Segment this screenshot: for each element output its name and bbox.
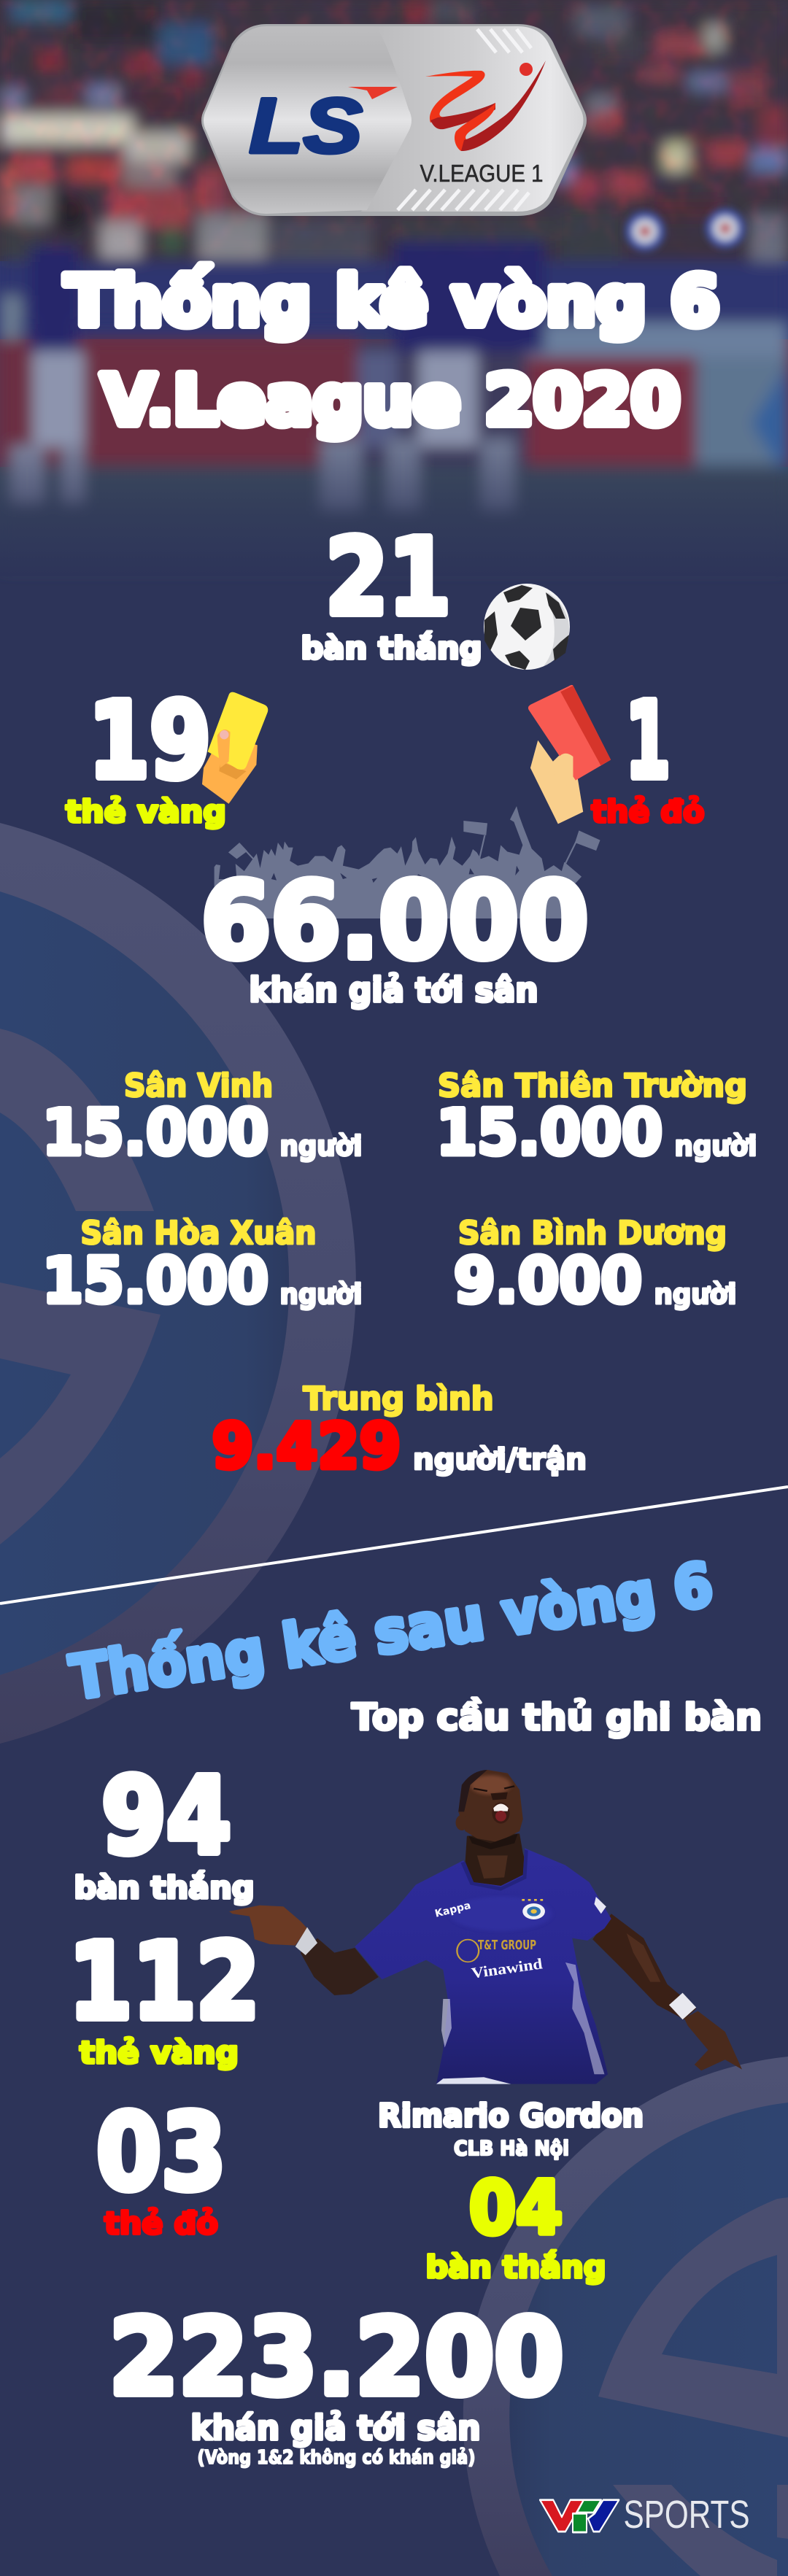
logo: VTV Sports — [540, 2493, 750, 2537]
title: V.League 2020 — [101, 361, 680, 441]
player goals: bàn thắng — [426, 2249, 606, 2285]
icon: crowd silhouette — [215, 806, 600, 918]
season stat: total attendance — [109, 2296, 563, 2469]
stat: average attendance: Trung bình — [304, 1380, 493, 1417]
illustration: top scorer player — [229, 1770, 742, 2084]
stat: yellow cards: 19 — [88, 679, 211, 802]
icon: football — [484, 584, 570, 670]
player name and club — [378, 2097, 644, 2160]
season stat: red cards: thẻ đỏ — [104, 2205, 218, 2241]
stadium: Sân Hòa Xuân: người — [280, 1278, 362, 1310]
stadium: Sân Vinh: người — [280, 1130, 362, 1162]
watermark: left circular emblem — [0, 823, 356, 1744]
season stat: goals: 94 — [101, 1755, 231, 1877]
player goals — [426, 2165, 606, 2285]
stadium: Sân Vinh: 15.000 — [42, 1096, 269, 1169]
stadium: Sân Bình Dương: người — [654, 1278, 737, 1310]
logo: LS V.League 1 badge: V.LEAGUE 1 — [420, 160, 543, 187]
stat: total attendance this round: khán giả tới sân — [250, 970, 538, 1010]
stat: average attendance: người/trận — [413, 1443, 587, 1477]
background photo: blurred stadium crowd and players — [0, 0, 788, 576]
player name and club: CLB Hà Nội — [454, 2136, 569, 2160]
stat: red cards: thẻ đỏ — [591, 794, 705, 829]
illustration: top scorer player: Kappa — [434, 1900, 472, 1920]
player name and club: Rimario Gordon — [378, 2097, 644, 2135]
stadium: Sân Vinh: Sân Vinh — [124, 1067, 273, 1105]
icon: hand with yellow card — [202, 692, 268, 804]
player goals: 04 — [469, 2165, 563, 2251]
stat: goals this round: bàn thắng — [301, 630, 482, 666]
stadium: Sân Vinh — [42, 1067, 362, 1169]
section heading: after round 6: Thống kê sau vòng 6 — [66, 1550, 717, 1714]
stat: goals this round — [301, 516, 482, 666]
stadium: Sân Thiên Trường: Sân Thiên Trường — [438, 1067, 747, 1105]
season stat: total attendance: khán giả tới sân — [191, 2408, 480, 2448]
icon: hand with red card — [528, 685, 611, 824]
stat: average attendance: 9.429 — [212, 1410, 401, 1483]
title — [65, 262, 719, 441]
stadium: Sân Hòa Xuân: Sân Hòa Xuân — [80, 1215, 317, 1252]
stat: yellow cards: thẻ vàng — [66, 794, 226, 829]
stadium: Sân Thiên Trường: 15.000 — [436, 1096, 663, 1169]
stadium: Sân Bình Dương: Sân Bình Dương — [458, 1215, 727, 1252]
stat: yellow cards — [66, 679, 226, 829]
season stat: red cards: 03 — [96, 2091, 226, 2213]
logo: VTV Sports: SPORTS — [623, 2493, 750, 2537]
logo: LS V.League 1 badge — [201, 24, 587, 216]
season stat: yellow cards: thẻ vàng — [80, 2035, 239, 2070]
season stat: goals: bàn thắng — [74, 1870, 254, 1906]
stat: red cards — [591, 679, 705, 829]
stat: goals this round: 21 — [325, 516, 451, 638]
season stat: yellow cards: 112 — [69, 1920, 260, 2043]
illustration: top scorer player: Vinawind — [471, 1954, 544, 1982]
logo: LS V.League 1 badge: LS — [250, 82, 362, 169]
season stat: goals — [74, 1755, 254, 1906]
illustration: top scorer player: T&T GROUP — [478, 1938, 536, 1953]
stadium: Sân Thiên Trường — [436, 1067, 757, 1169]
stadium: Sân Hòa Xuân: 15.000 — [42, 1245, 269, 1318]
heading: top scorer: Top cầu thủ ghi bàn — [352, 1696, 762, 1738]
stat: average attendance — [212, 1380, 587, 1483]
stat: total attendance this round: 66.000 — [201, 859, 588, 982]
stadium: Sân Hòa Xuân — [42, 1215, 362, 1318]
watermark: bottom right circular emblem — [463, 2057, 788, 2576]
stadium: Sân Bình Dương — [454, 1215, 737, 1318]
title: Thống kê vòng 6 — [65, 262, 719, 341]
season stat: total attendance: (Vòng 1&2 không có khán giả) — [197, 2446, 476, 2469]
stadium: Sân Thiên Trường: người — [674, 1130, 757, 1162]
stat: red cards: 1 — [625, 679, 671, 802]
stadium: Sân Bình Dương: 9.000 — [454, 1245, 642, 1318]
season stat: total attendance: 223.200 — [109, 2296, 563, 2418]
